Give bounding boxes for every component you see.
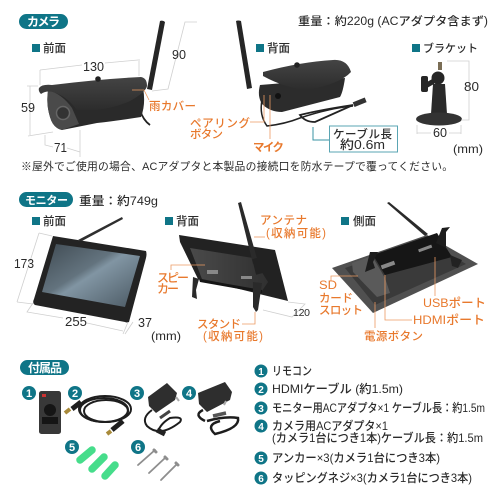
monitor front dimensions: 173 [14, 256, 34, 271]
label: camera front [32, 41, 66, 55]
badge 3: 3 [134, 388, 140, 400]
callout: SD card slot: SD [319, 280, 337, 292]
callout: power button: 電源ボタン [364, 329, 423, 343]
heading: camera [19, 14, 68, 29]
camera front dimensions: 59 [21, 100, 35, 115]
screws [138, 450, 178, 480]
callout: speaker [157, 265, 205, 296]
camera weight: 重量：約220g (ACアダプタ含まず) [298, 14, 488, 28]
callout: cable length: 約0.6m [340, 137, 385, 152]
remote [39, 391, 61, 434]
bracket dimensions: 80 [464, 79, 479, 94]
item 4: カメラ用ACアダプタ×1 [272, 418, 388, 433]
item 3: 3 [258, 404, 264, 415]
green anchors [80, 450, 115, 476]
monitor front dimensions [14, 233, 152, 334]
callout: stand: スタンド [197, 318, 241, 331]
callout: cable length [313, 126, 398, 152]
camera back photo [236, 20, 367, 126]
badge 2 [68, 386, 82, 400]
label: monitor front: 前面 [43, 214, 66, 228]
camera front dimensions: 71 [54, 140, 67, 155]
accessory photos [22, 382, 238, 480]
callout: rain cover [132, 90, 196, 113]
camera front dimensions [21, 22, 197, 157]
label: monitor back: 背面 [176, 214, 199, 228]
heading: accessories [20, 360, 69, 375]
label: camera back [256, 41, 290, 55]
AC adapter 3 [145, 383, 181, 434]
item 6: タッピングネジ×3(カメラ1台につき3本) [272, 470, 472, 485]
label: monitor side [341, 215, 376, 228]
AC adapter 4 [198, 382, 238, 434]
monitor front dimensions: 37 [138, 315, 152, 330]
camera front dimensions: 90 [172, 47, 186, 62]
label: monitor front [32, 214, 66, 228]
item 2: HDMIケーブル (約1.5m) [272, 381, 403, 396]
callout: USB port: USBポート [423, 296, 486, 310]
label: camera back: 背面 [267, 41, 290, 55]
callout: pairing button: ボタン [190, 128, 223, 141]
item 4: 4 [258, 422, 264, 433]
monitor back dimension [263, 302, 310, 319]
label: monitor back [165, 214, 199, 228]
badge 6: 6 [135, 442, 141, 454]
callout: stand [197, 312, 263, 343]
accessory list [254, 364, 485, 485]
callout: antenna: (収納可能) [266, 226, 326, 240]
camera front dimensions: 130 [83, 59, 104, 74]
item 2: 2 [258, 385, 264, 396]
callout: SD card slot: カード [319, 292, 353, 305]
item 1: 1 [258, 367, 264, 378]
heading: accessories: 付属品 [28, 360, 62, 375]
callout: pairing button [190, 95, 264, 141]
unit: mm (camera): (mm) [453, 142, 483, 156]
badge 2: 2 [72, 388, 78, 400]
badge 5: 5 [69, 442, 75, 454]
callout: pairing button: ペアリング [190, 116, 250, 130]
unit: mm (monitor): (mm) [151, 329, 181, 343]
label: camera front: 前面 [43, 41, 66, 55]
callout: speaker: カー [157, 282, 179, 296]
label: bracket: ブラケット [423, 41, 478, 55]
bracket photo [416, 62, 462, 126]
badge 3 [130, 386, 144, 400]
callout: microphone: マイク [253, 141, 284, 154]
monitor back dimension: 120 [293, 307, 310, 319]
item 1 [254, 364, 312, 378]
monitor weight: 重量：約749g [79, 193, 158, 208]
callout: cable length: ケーブル長 [333, 127, 392, 141]
item 4 [254, 418, 483, 445]
heading: camera: カメラ [27, 15, 60, 29]
callout: antenna: アンテナ [260, 214, 307, 227]
callout: USB port [423, 257, 486, 310]
callout: microphone [253, 95, 284, 154]
callout: rain cover: 雨カバー [149, 100, 196, 113]
badge 4 [182, 386, 196, 400]
callout: HDMI port: HDMIポート [413, 313, 485, 327]
callout: SD card slot [319, 276, 363, 317]
monitor back photo [179, 202, 288, 312]
heading: monitor: モニター [25, 194, 68, 207]
label: monitor side: 側面 [353, 215, 376, 228]
callout: stand: (収納可能) [203, 329, 263, 343]
item 5: 5 [258, 454, 264, 465]
bracket dimensions: 60 [433, 125, 447, 140]
callout: HDMI port [385, 275, 485, 327]
item 1: リモコン [272, 364, 312, 378]
callout: antenna [254, 214, 326, 240]
camera front photo [39, 21, 165, 130]
item 4: (カメラ1台につき1本)ケーブル長：約1.5m [272, 430, 483, 445]
HDMI cable [65, 396, 131, 434]
bracket dimensions [417, 61, 479, 140]
heading: monitor [19, 192, 73, 207]
badge 1 [22, 386, 36, 400]
callout: SD card slot: スロット [319, 305, 363, 317]
badge 5 [65, 440, 79, 454]
monitor front photo [33, 217, 147, 322]
badge 1: 1 [26, 388, 32, 400]
callout: speaker: スピー [157, 271, 189, 285]
note: ※屋外でご使用の場合、ACアダプタと本製品の接続口を防水テープで覆ってください。 [21, 159, 453, 173]
callout: power button [364, 302, 423, 343]
item 5: アンカー×3(カメラ1台につき3本) [272, 450, 440, 465]
monitor front dimensions: 255 [65, 314, 87, 329]
badge 4: 4 [186, 388, 193, 400]
monitor side photo [332, 202, 478, 313]
item 6: 6 [258, 474, 264, 485]
badge 6 [131, 440, 145, 454]
